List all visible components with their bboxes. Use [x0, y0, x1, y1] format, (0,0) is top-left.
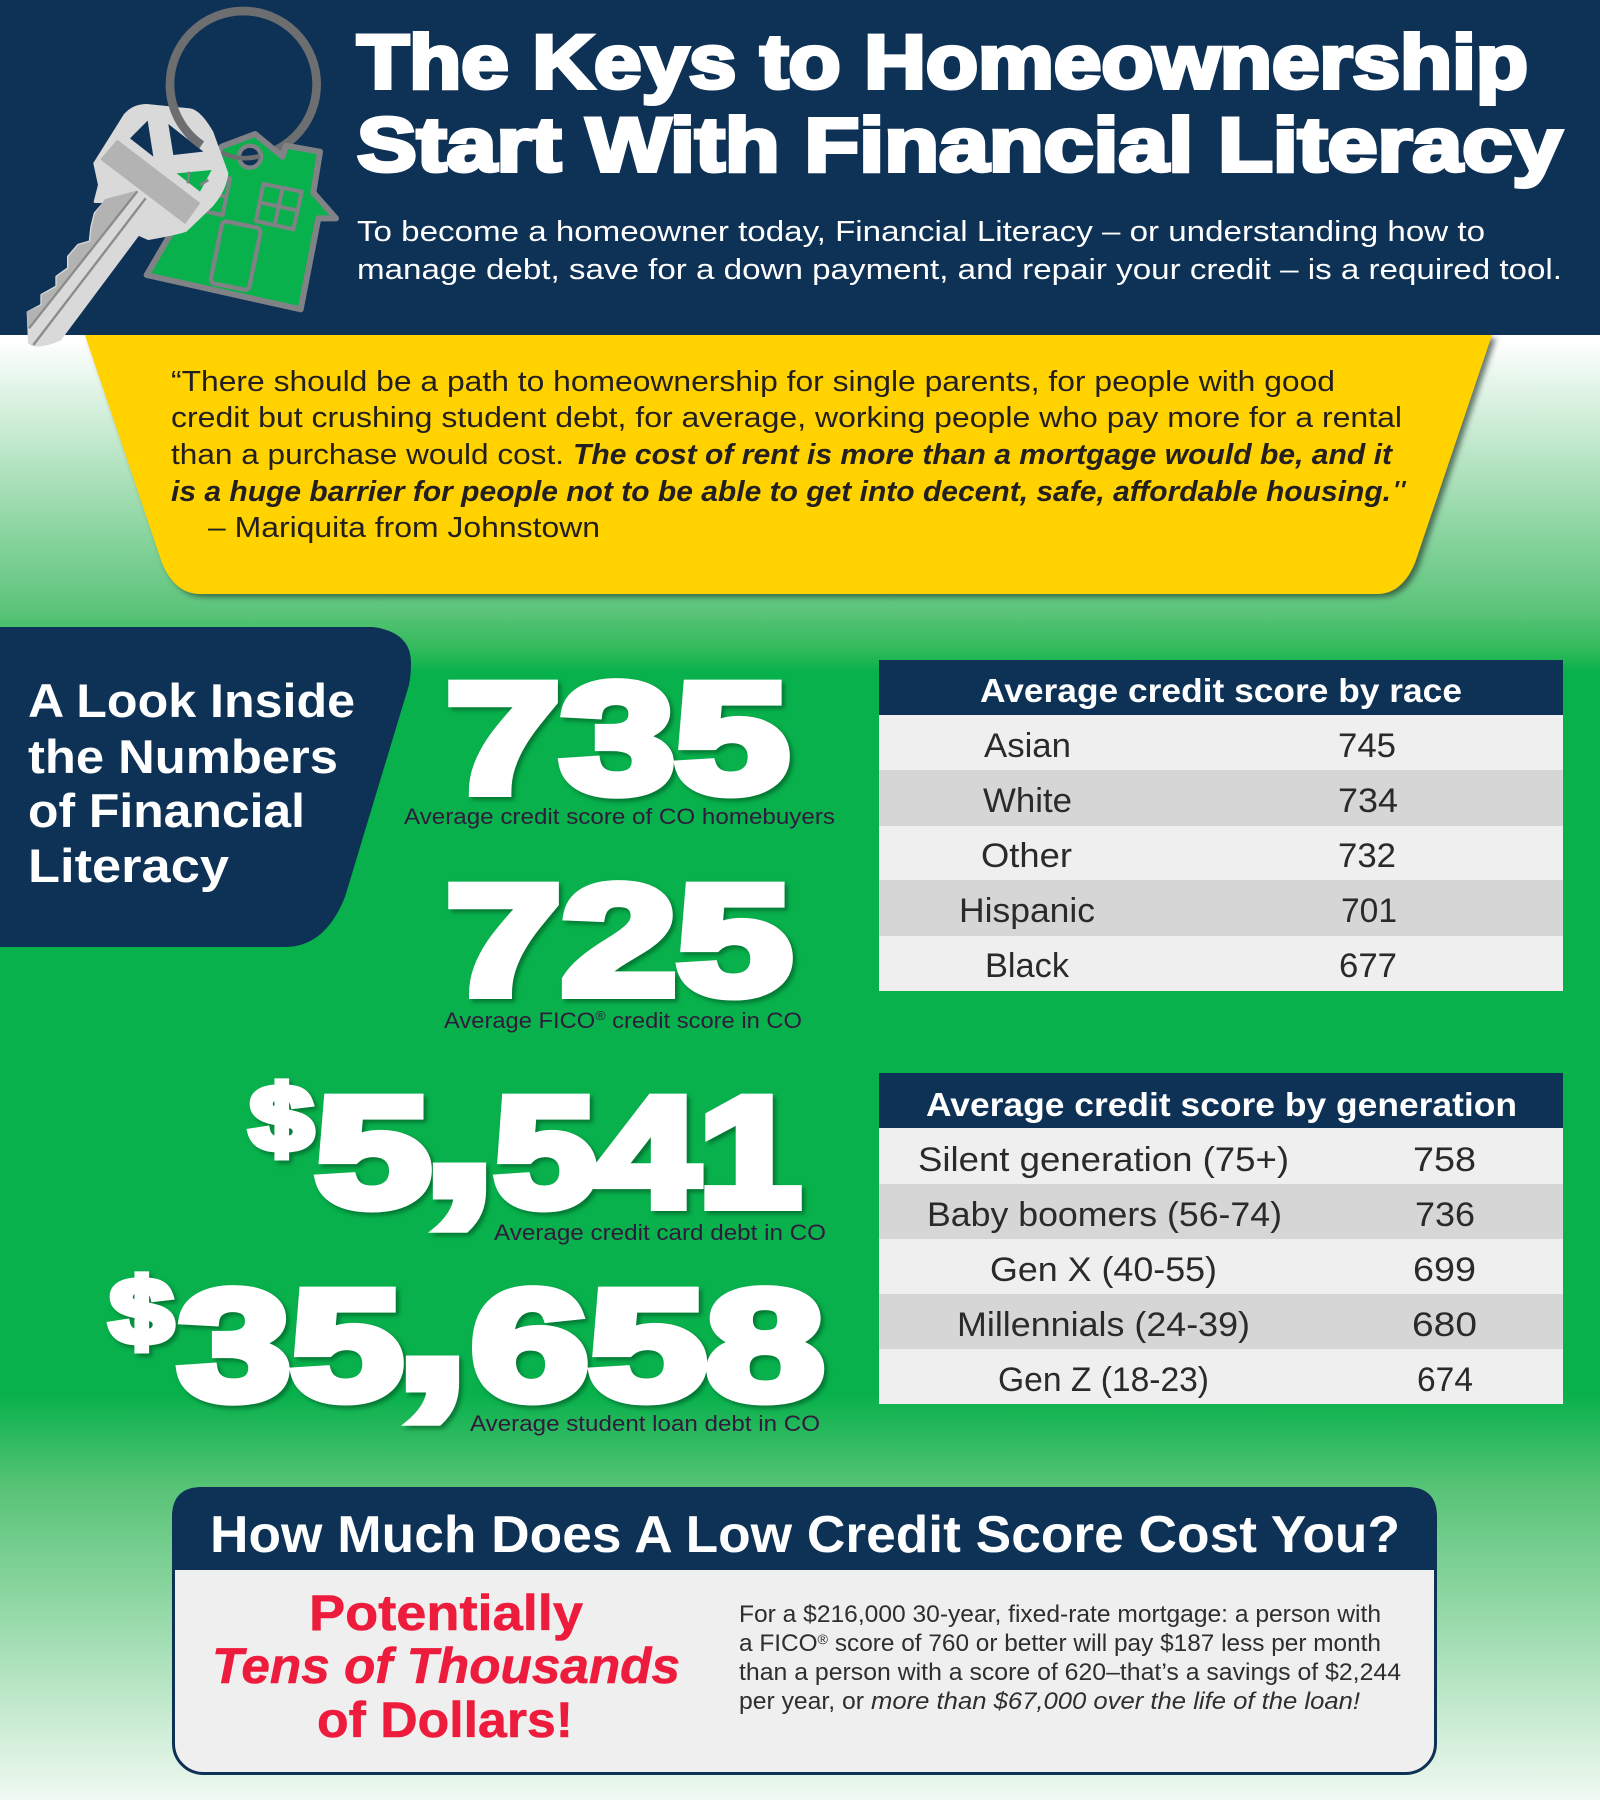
title: Start With Financial Literacy [357, 103, 1562, 188]
stat: $5,541 credit card debt [250, 1002, 801, 1243]
mortgage explanation text: per year, or [739, 1688, 864, 1715]
header intro text: To become a homeowner today, Financial Literacy – or understanding how to [357, 216, 1485, 248]
table: average credit score by generation: Gen X (40-55) [990, 1251, 1217, 1289]
panel heading: How Much Does A Low Credit Score Cost You? [210, 1506, 1400, 1564]
panel: a look inside the numbers: the Numbers [28, 730, 338, 783]
stat: 735 credit score of homebuyers: 735 [446, 652, 789, 826]
stat: $35,658 student loan debt [110, 1195, 824, 1436]
stat: 725 FICO score: credit score in CO [606, 1008, 802, 1033]
table: average credit score by race: White [983, 782, 1072, 820]
house tag [147, 134, 336, 309]
stat: $35,658 student loan debt: 658 [471, 1259, 824, 1433]
red callout: Potentially [309, 1585, 583, 1641]
stat: 735 credit score of homebuyers: Average credit score of CO homebuyers [404, 804, 835, 829]
table: average credit score by generation: 699 [1413, 1251, 1476, 1289]
quote text: “There should be a path to homeownership for single parents, for people with good [171, 366, 1335, 398]
red callout: Tens of Thousands [212, 1638, 680, 1694]
caption: student loan debt: Average student loan debt in CO [470, 1411, 820, 1436]
table: average credit score by generation [879, 1073, 1563, 1404]
stat: $5,541 credit card debt: $ [250, 1068, 313, 1170]
table: average credit score by race: 734 [1338, 782, 1398, 820]
table: average credit score by race: Other [981, 837, 1072, 875]
panel: a look inside the numbers: Literacy [28, 839, 229, 892]
table: average credit score by race: 701 [1341, 892, 1397, 930]
key [27, 105, 227, 345]
stat: $35,658 student loan debt: 35 [178, 1259, 403, 1433]
quote text: than a purchase would cost. [171, 439, 564, 471]
table: average credit score by race [879, 660, 1563, 991]
key ring [170, 11, 317, 158]
icon: keys with house keychain [27, 11, 336, 345]
panel: how much does a low credit score cost you [172, 1487, 1437, 1774]
header intro text [357, 216, 1562, 286]
quote text: credit but crushing student debt, for average, working people who pay more for a rental [171, 402, 1402, 434]
red callout: of Dollars! [317, 1692, 573, 1748]
table: average credit score by generation: 674 [1417, 1361, 1473, 1399]
table: average credit score by race: 732 [1338, 837, 1396, 875]
stat: $5,541 credit card debt: 541 [494, 1066, 801, 1240]
mortgage explanation text: ® [818, 1631, 829, 1647]
panel: a look inside the numbers [0, 627, 411, 947]
table: average credit score by generation: Silent generation (75+) [918, 1141, 1289, 1179]
mortgage explanation text: For a $216,000 30-year, fixed-rate mortgage: a person with [739, 1601, 1381, 1628]
stat: $5,541 credit card debt: , [414, 1002, 504, 1243]
header band [0, 0, 1600, 335]
mortgage explanation text: than a person with a score of 620–that’s a savings of $2,244 [739, 1659, 1401, 1686]
table: average credit score by race: 745 [1338, 727, 1396, 765]
quote text: – Mariquita from Johnstown [208, 512, 600, 544]
caption: credit card debt: Average credit card debt in CO [494, 1220, 826, 1245]
table: average credit score by race: Black [985, 947, 1070, 985]
mortgage explanation text: score of 760 or better will pay $187 less per month [828, 1630, 1381, 1657]
mortgage explanation text: a FICO [739, 1630, 816, 1657]
mortgage explanation text: more than $67,000 over the life of the loan! [871, 1688, 1360, 1715]
stat: $35,658 student loan debt: , [387, 1195, 477, 1436]
title [357, 20, 1562, 188]
table: average credit score by race: Average credit score by race [980, 672, 1462, 709]
stat: 725 FICO score: 725 [446, 854, 792, 1028]
key ring front segment [170, 84, 202, 145]
table: average credit score by generation: Gen Z (18-23) [998, 1361, 1209, 1399]
stat: 725 FICO score: ® [595, 1008, 606, 1023]
red callout [212, 1585, 680, 1748]
panel: a look inside the numbers: A Look Inside [28, 674, 355, 727]
table: average credit score by race: Asian [984, 727, 1071, 765]
quote text: is a huge barrier for people not to be able to get into decent, safe, affordable housing. [171, 476, 1391, 508]
quote text [171, 366, 1407, 544]
stat: $35,658 student loan debt: $ [110, 1261, 173, 1363]
stat: 735 credit score of homebuyers [404, 652, 835, 829]
quote banner [85, 335, 1492, 594]
stat: $5,541 credit card debt: 5 [315, 1066, 431, 1240]
table: average credit score by generation: 758 [1413, 1141, 1476, 1179]
stat: 725 FICO score: Average FICO [444, 1008, 584, 1033]
header intro text: manage debt, save for a down payment, and repair your credit – is a required tool. [357, 254, 1562, 286]
table: average credit score by race: Hispanic [959, 892, 1095, 930]
table: average credit score by generation: Baby boomers (56-74) [927, 1196, 1282, 1234]
panel: a look inside the numbers: of Financial [28, 784, 305, 837]
title: The Keys to Homeownership [357, 20, 1528, 105]
table: average credit score by race: 677 [1339, 947, 1397, 985]
table: average credit score by generation: 680 [1412, 1306, 1477, 1344]
quote text: " [1392, 476, 1407, 508]
quote text: The cost of rent is more than a mortgage would be, and it [573, 439, 1393, 471]
table: average credit score by generation: 736 [1415, 1196, 1475, 1234]
mortgage explanation text [739, 1601, 1401, 1715]
table: average credit score by generation: Average credit score by generation [926, 1086, 1517, 1123]
table: average credit score by generation: Millennials (24-39) [957, 1306, 1250, 1344]
